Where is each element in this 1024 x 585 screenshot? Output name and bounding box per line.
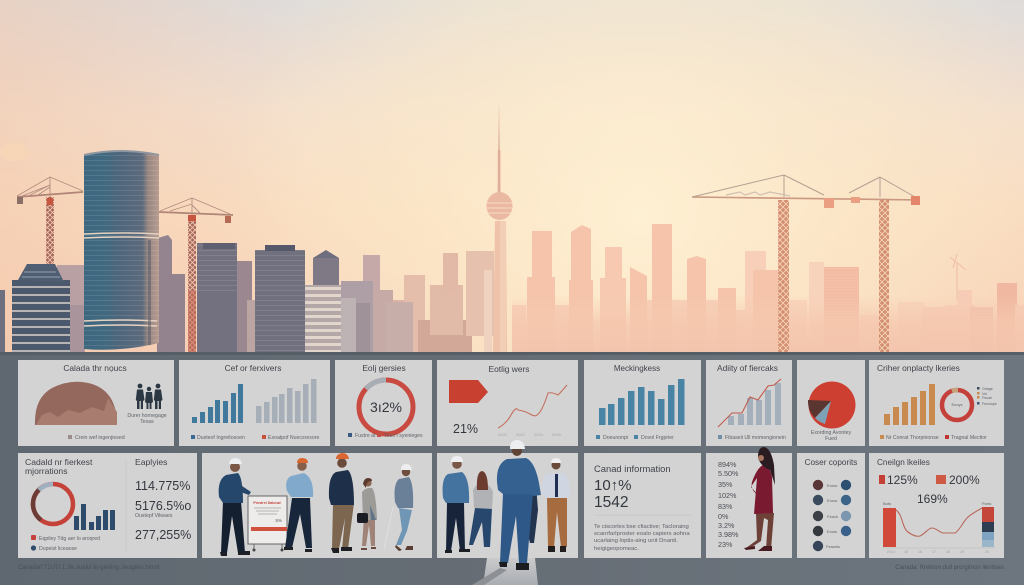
side legend: Fenciupe [982,402,997,406]
panel: credit charts: 19 [960,550,964,554]
person: woman with bag [357,478,377,550]
heading: panel twelve: Canad information [594,463,671,474]
percentage list: 35% [718,480,733,489]
caption: Durer hornegage [127,413,167,419]
legend [31,535,100,552]
percentage list [718,460,739,549]
panel: geographic dome: Texas [140,419,154,425]
donut value: 3ı2% [370,399,402,415]
heading: panel one: Calada thr nọucs [63,363,127,373]
ring label: Enoys [951,402,963,407]
legend [191,435,319,441]
main glass tower [84,150,159,350]
legend: Doeunonpi [603,435,628,441]
panel: orange bars and ring [869,360,1004,446]
stat values: 114.775% [135,479,190,493]
legend: Tragnal Mectior [951,435,987,441]
side legend: Vul [982,392,987,396]
person: tall worker orange hat [329,453,354,553]
stats: 169% [917,492,948,506]
panel: credit charts: 2014 [887,550,895,554]
legend: Fibaseii Ull momengionein [725,435,786,441]
panel: pie chart: Fued [825,436,837,442]
dot labels: Feach [827,514,838,519]
sign board [248,496,287,552]
body text [594,524,690,552]
panel: credit charts: 20 [985,550,989,554]
dot labels [826,483,840,549]
heading: panel six: Adiity of fiercaks [717,363,778,373]
stat values: Oustepf Vilwaes [135,513,173,519]
legend [880,435,987,441]
legend: Dusteof Ingreitosoen [197,435,245,441]
heading: panel eight: Criher onplacty lkeries [877,363,960,373]
stat values: 10↑% [594,477,632,494]
panel: pie chart [797,360,865,446]
chart: curve [896,508,982,536]
heading: panel fifteen: Cneilgn lkeiles [877,458,930,467]
caption: Exording Avontey [811,430,852,436]
chart: blue bars [192,384,243,423]
panel: paired bar charts [179,360,330,446]
stat values [594,477,632,511]
dot labels: Ennor [827,483,838,488]
sign board: Prestrel Dalonal [253,501,281,505]
person: worker with cane [384,464,413,551]
panel: credit charts: 15 [904,550,908,554]
stat values [135,479,191,542]
body text: ucarlaing loptis-aing unit Dnanti. [594,538,678,544]
axis labels: 2022 [516,432,526,437]
panel: percent list with woman [706,447,792,558]
chart: grey bars [256,379,316,423]
panel: stakeholders group [437,440,578,585]
heading: panel two: Cef or ferxivers [225,363,281,373]
person: hidden dark figure [526,472,538,543]
axis labels: 2024 [534,432,544,437]
chart: donut [359,380,413,434]
icon: dome chart [35,382,117,425]
heading: panel four: Eotlig wers [489,364,529,374]
panel: geographic dome [18,360,174,446]
panel: credit charts: 18 [946,550,950,554]
chart: bars [599,379,684,425]
percentage list: 894% [718,460,737,469]
legend: Tous I syenieges [384,433,423,439]
chart: ring [942,390,972,420]
percentage list: 23% [718,540,733,549]
divider [125,460,127,552]
left dots [813,480,823,551]
panel: workers and sign [202,453,432,558]
tower crane right two [849,177,920,352]
heading: market information: Cadald nr fierkest [25,457,93,467]
panel: corporate dots [797,453,865,558]
panel: credit charts [869,453,1004,558]
dot labels: Ennor [827,498,838,503]
panel: donut percentage [335,360,432,446]
far skyline right [512,224,1024,352]
tower crane right one [692,175,920,352]
percentage list: 102% [718,491,737,500]
dashboard background [0,352,1024,585]
percentage list: 3.2% [718,521,735,530]
panel: market information [18,453,197,558]
chart: red bar [883,508,896,547]
percentage list: 5.50% [718,469,739,478]
panel: market information: mjorrations [25,466,68,476]
footer note left: Canadiaf T1UTI 1 Jik sualul te-gieliing Jiesgiies bioint [18,565,160,571]
person: worker tie and tan pants [542,458,570,552]
person: worker blue shirt [443,456,470,553]
side legend: Feuah [982,396,992,400]
chart: donut [33,484,73,524]
right dots [841,480,851,536]
dot labels: Feacels [826,544,840,549]
chart: bars [884,384,935,425]
percentage list: 3.98% [718,530,739,539]
axis labels: 2020 [498,432,508,437]
legend: Nr Conrat Thorpnionse [886,435,939,441]
stats: 125% [887,473,918,487]
left skyline buildings [0,235,341,352]
tower with striped base [12,264,70,352]
legend: Dovol Frgprier [641,435,674,441]
divider [594,514,692,516]
panel: credit charts: 16 [918,550,922,554]
panel: bars with line [706,360,792,446]
heading: panel three: Eolj gersies [362,363,406,373]
heading: panel five: Meckingkess [614,364,660,373]
chart: pie [808,382,856,428]
percentage list: 83% [718,502,733,511]
stats: 200% [949,473,980,487]
icon: three people [136,384,162,409]
legend: Crein wef ingenjiesed [75,435,125,441]
footer note right: Canada: Rretrion dull prorgimon lleritises [895,565,1004,571]
side legend [977,387,997,406]
panel: credit charts: Bots [883,501,891,506]
panel: credit charts: Ports [982,501,991,506]
body text: heigigeopomeac. [594,546,639,552]
body text: Te ciscorles bse cfiactive; Tacloraing [594,524,689,530]
person: woman grey top [469,471,493,547]
small distant crane [950,254,966,300]
chart: bars [74,504,115,530]
legend [348,433,423,439]
legend: Dupeist liceaose [39,546,77,552]
stat values: 5176.5%o [135,499,191,513]
person: woman in red dress [744,447,775,551]
legend: Exoatpof Nuecsresore [268,435,319,441]
stats [879,473,980,506]
stat values: 1542 [594,494,628,511]
sign board: 5% [275,518,282,523]
axis labels: 2026 [552,432,562,437]
chart: stacked bar [982,507,994,547]
stat: 21% [453,422,478,436]
side legend: Oriage [982,387,993,391]
legend [596,435,674,441]
legend: Eqpiley Tdg aer lo aroqred [39,536,100,542]
heading: panel fourteen: Coser cọporits [805,458,857,467]
body text: scanrfarlproster eoalo capiers aohna [594,531,690,537]
icon: red arrow [449,380,488,403]
dot labels: Enois [827,529,837,534]
sky background [0,0,1024,352]
chart: bars [728,383,781,425]
panel: credit charts: 17 [932,550,936,554]
axis labels [498,432,562,437]
CN tower [486,100,512,352]
stat values: 277,255% [135,528,191,542]
chart: line [718,379,781,427]
person: foreground coverall worker [497,440,541,570]
person: worker orange hat light shirt [284,458,313,552]
chart: trend line [498,385,567,428]
legend: Fustre at [355,433,376,439]
percentage list: 0% [718,512,729,521]
person: worker white hat [219,458,251,556]
construction crane left centre [159,198,233,352]
construction crane far left [17,177,83,264]
mid skyline [341,251,494,352]
axis [882,547,995,549]
panel: Canada information [584,453,701,558]
panel: blue bar chart [584,360,701,446]
walkway path [472,558,538,585]
heading: employees: Eaplyies [135,457,167,467]
panel: arrow and trend [437,360,578,446]
